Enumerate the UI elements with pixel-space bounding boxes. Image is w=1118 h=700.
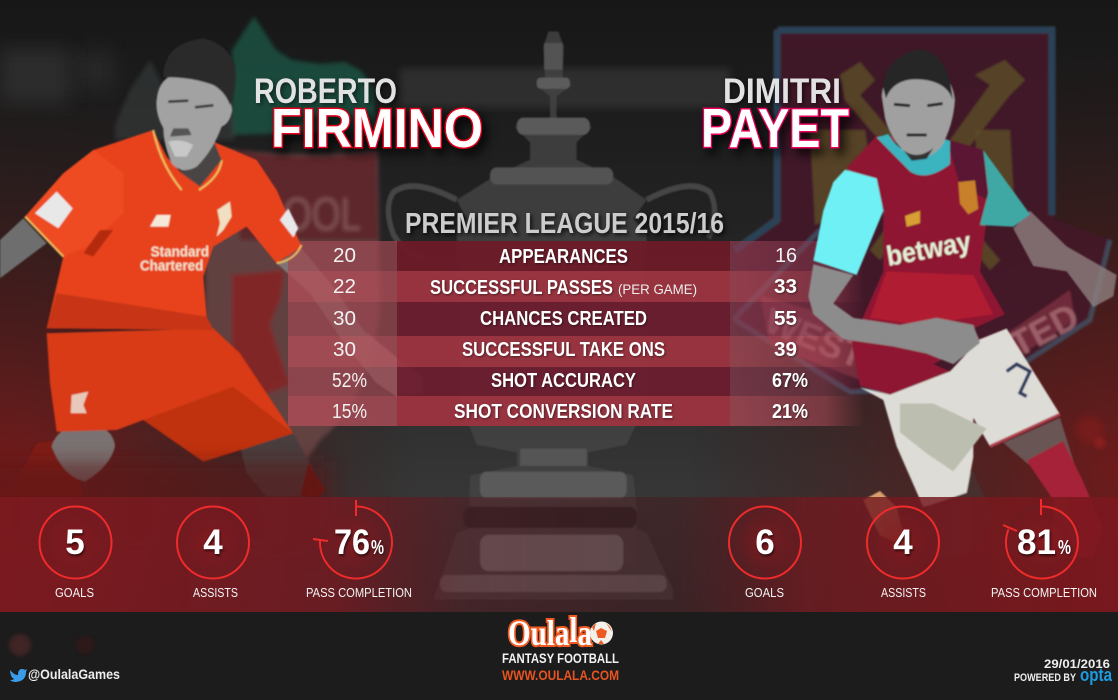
footer — [0, 612, 1118, 700]
far arm — [1013, 211, 1117, 307]
kit badges and sponsor — [884, 180, 978, 272]
row: chances created: CHANCES CREATED — [480, 308, 647, 330]
shirt — [25, 130, 302, 330]
leg fade into band — [0, 462, 330, 552]
legs — [863, 418, 1103, 557]
stat: Firmino pass completion: % — [371, 537, 384, 559]
row: shot conversion rate — [332, 401, 808, 423]
stat: Payet assists — [867, 506, 939, 600]
left sleeve — [813, 170, 883, 275]
row: appearances: 16 — [775, 245, 797, 267]
payet name: DIMITRI — [723, 72, 841, 111]
neck and collar — [877, 134, 950, 175]
stat: Firmino goals: GOALS — [55, 586, 94, 600]
row: successful take ons: SUCCESSFUL TAKE ONS — [462, 339, 665, 361]
shirt sponsor: Chartered — [140, 259, 203, 275]
row: chances created — [333, 308, 797, 330]
date and data credit: 29/01/2016 — [1044, 657, 1110, 671]
shirt — [847, 136, 1005, 395]
arm — [808, 264, 980, 364]
crest: West Ham: TED — [1003, 295, 1085, 365]
date and data credit — [1014, 657, 1113, 685]
crest: Liverpool — [115, 16, 380, 470]
firmino name: ROBERTO — [254, 72, 397, 111]
stat: Payet pass completion — [991, 499, 1097, 600]
row: successful take ons: 30 — [333, 339, 356, 361]
payet name — [701, 72, 849, 159]
stat: Payet pass completion: PASS COMPLETION — [991, 586, 1097, 600]
stats band — [0, 497, 1118, 612]
stat: Firmino pass completion: PASS COMPLETION — [306, 586, 412, 600]
firmino name — [254, 72, 483, 159]
crest: Liverpool: OOL — [283, 188, 361, 240]
logo wordmark: Oula — [508, 613, 584, 653]
stat: Firmino pass completion — [306, 500, 412, 600]
stat: Payet goals — [729, 506, 801, 600]
row: successful passes — [333, 276, 797, 299]
stat: Firmino goals: 5 — [65, 523, 85, 562]
row: successful passes: SUCCESSFUL PASSES — [430, 277, 613, 299]
shirt sponsor — [140, 245, 209, 275]
date and data credit: POWERED BY — [1014, 672, 1077, 684]
row: shot conversion rate: 21% — [772, 401, 808, 423]
stat: Firmino assists — [177, 506, 249, 600]
stat: Firmino goals — [40, 506, 112, 600]
row: shot accuracy: 67% — [772, 370, 808, 392]
shorts — [47, 328, 293, 462]
icon: twitter bird — [10, 669, 27, 682]
stat: Payet pass completion: % — [1058, 537, 1071, 559]
icon: football — [590, 622, 613, 644]
table rows — [288, 241, 865, 426]
right sleeve — [980, 150, 1030, 227]
row: successful passes: (PER GAME) — [618, 281, 697, 297]
crest: West Ham — [733, 28, 1110, 395]
legs — [7, 424, 325, 497]
row: shot accuracy — [332, 370, 808, 392]
stat: Payet pass completion: 81 — [1017, 523, 1056, 562]
firmino name: FIRMINO — [271, 97, 483, 159]
stat: Payet assists: ASSISTS — [881, 586, 926, 600]
row: appearances: 20 — [333, 245, 356, 267]
payet name: PAYET — [701, 97, 849, 159]
row: chances created: 30 — [333, 308, 356, 330]
kit badges — [35, 192, 298, 413]
collar and cuff trim — [25, 130, 302, 263]
player: Payet — [808, 50, 1117, 557]
stat: Payet assists: 4 — [893, 523, 913, 562]
row: shot accuracy: 52% — [332, 370, 367, 392]
back arm — [0, 218, 47, 278]
shorts — [860, 329, 1060, 507]
row: chances created: 55 — [774, 308, 797, 330]
logo wordmark: l — [569, 610, 577, 650]
row: appearances — [333, 245, 797, 268]
row: successful passes: 22 — [333, 276, 356, 298]
head — [882, 50, 955, 161]
row: successful take ons: 39 — [774, 339, 797, 361]
date and data credit: opta — [1080, 665, 1113, 685]
stat: Payet goals: GOALS — [745, 586, 784, 600]
stat: Firmino assists: 4 — [203, 523, 223, 562]
row: shot conversion rate: 15% — [332, 401, 367, 423]
trophy — [388, 31, 715, 600]
table: season stats — [288, 241, 865, 426]
player: Firmino — [0, 38, 325, 497]
row: successful take ons — [333, 339, 797, 361]
logo: Oulala Fantasy Football: WWW.OULALA.COM — [502, 668, 619, 683]
stat: Firmino pass completion: 76 — [334, 523, 370, 562]
row: successful passes: 33 — [774, 276, 797, 298]
neck and head — [156, 38, 236, 187]
logo: Oulala Fantasy Football: FANTASY FOOTBALL — [502, 651, 619, 666]
kit badges and sponsor: betway — [884, 226, 973, 272]
player: Firmino forearm behind table — [277, 248, 423, 397]
row: appearances: APPEARANCES — [499, 246, 628, 268]
shirt sponsor: Standard — [151, 245, 209, 261]
row: shot conversion rate: SHOT CONVERSION RATE — [454, 401, 673, 423]
stat: Firmino assists: ASSISTS — [193, 586, 238, 600]
stat: Payet goals: 6 — [755, 523, 775, 562]
crest: West Ham: WEST — [759, 299, 871, 376]
twitter handle: @OulalaGames — [28, 667, 120, 682]
row: shot accuracy: SHOT ACCURACY — [491, 370, 637, 392]
logo wordmark: a — [577, 613, 592, 653]
heading: Premier League 2015/16: PREMIER LEAGUE 2015/16 — [405, 208, 724, 240]
logo: Oulala Fantasy Football — [502, 610, 619, 683]
